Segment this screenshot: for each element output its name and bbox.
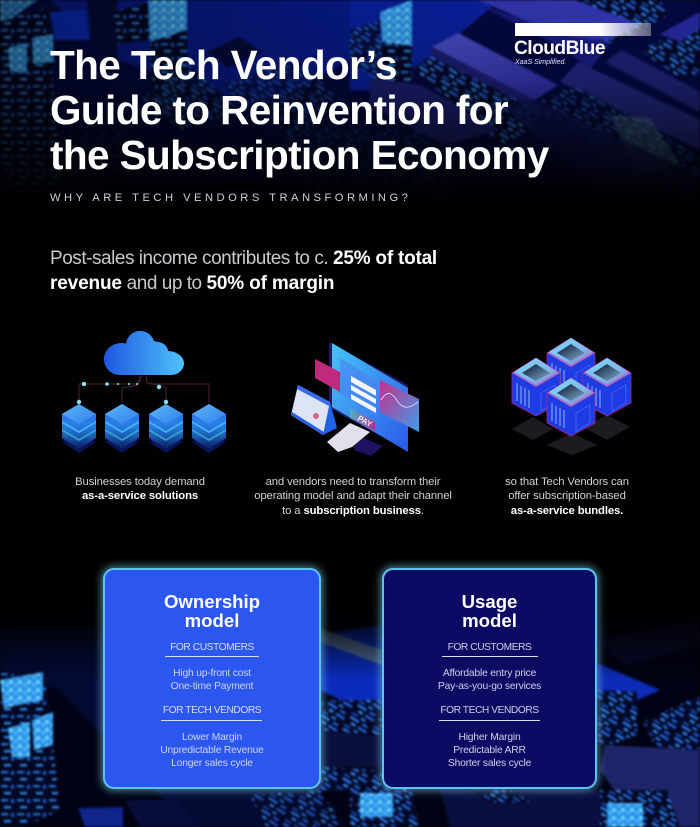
cloud	[104, 331, 184, 375]
panel: ownership model	[103, 568, 321, 789]
customer points: Affordable entry price	[443, 668, 536, 679]
receipt	[327, 423, 370, 452]
heading	[164, 591, 260, 631]
logo wordmark: CloudBlue	[514, 38, 605, 59]
connection lines	[79, 376, 209, 403]
heading: model	[185, 610, 239, 631]
caption: subscription business	[254, 476, 452, 516]
calendar	[291, 385, 337, 435]
intro statement: Post-sales income contributes to c. 25% of total	[50, 248, 437, 269]
icon: payment screen with calendar and receipt	[291, 342, 419, 456]
caption: as-a-service bundles	[505, 476, 629, 516]
vendor points: Longer sales cycle	[171, 758, 253, 769]
vendor points: Higher Margin	[458, 732, 521, 743]
vendor points: Shorter sales cycle	[448, 758, 531, 769]
bottom background	[0, 600, 700, 827]
pay button: PAY	[356, 414, 374, 429]
vendor points: Unpredictable Revenue	[160, 745, 264, 756]
caption: subscription business: and vendors need to transform their	[266, 476, 440, 488]
underline	[442, 656, 538, 657]
intro statement: revenue and up to 50% of margin	[50, 273, 334, 294]
caption: subscription business: to a subscription business.	[282, 504, 424, 516]
title: The Tech Vendor’s	[50, 42, 397, 88]
logo tagline: XaaS Simplified.	[515, 59, 566, 66]
chart panel	[380, 380, 419, 432]
vendor points: Lower Margin	[182, 732, 242, 743]
caption: as-a-service solutions: Businesses today demand	[75, 476, 205, 488]
title: the Subscription Economy	[50, 132, 549, 178]
vendor points	[160, 732, 264, 769]
top background	[0, 0, 700, 220]
heading: Usage	[462, 591, 517, 612]
credit card	[315, 359, 340, 392]
customer points	[438, 668, 541, 692]
caption: as-a-service solutions	[75, 476, 205, 502]
underline	[165, 656, 259, 657]
underline	[439, 720, 540, 721]
monitor	[329, 342, 408, 456]
vendor points	[448, 732, 531, 769]
underline	[161, 720, 262, 721]
for tech vendors label: FOR TECH VENDORS	[440, 705, 539, 716]
customer points: High up-front cost	[173, 668, 251, 679]
intro statement	[50, 248, 437, 294]
logo bar	[515, 23, 651, 36]
title: Guide to Reinvention for	[50, 86, 508, 132]
heading	[462, 591, 517, 631]
caption: as-a-service bundles: so that Tech Vendors can	[505, 476, 629, 488]
caption: subscription business: operating model and adapt their channel	[254, 490, 452, 502]
caption: as-a-service solutions: as-a-service solutions	[82, 490, 198, 502]
containers	[512, 338, 631, 436]
icon: cloud network with servers	[62, 331, 226, 453]
network nodes	[77, 382, 168, 404]
form fields	[351, 376, 376, 413]
heading: model	[462, 610, 517, 631]
for customers label: FOR CUSTOMERS	[170, 642, 254, 653]
pay button	[350, 408, 375, 431]
subtitle: WHY ARE TECH VENDORS TRANSFORMING?	[50, 192, 411, 204]
title	[50, 42, 549, 178]
logo: CloudBlue	[514, 23, 651, 66]
for tech vendors label: FOR TECH VENDORS	[163, 705, 261, 716]
customer points	[171, 668, 254, 692]
heading: Ownership	[164, 591, 260, 612]
caption: as-a-service bundles: as-a-service bundles.	[511, 504, 623, 516]
customer points: Pay-as-you-go services	[438, 681, 541, 692]
customer points: One-time Payment	[171, 681, 253, 692]
shadows	[512, 415, 630, 455]
panel: usage model	[382, 568, 597, 789]
server stacks	[62, 404, 226, 453]
vendor points: Predictable ARR	[453, 745, 526, 756]
caption: as-a-service bundles: offer subscription-based	[508, 490, 626, 502]
for customers label: FOR CUSTOMERS	[448, 642, 531, 653]
icon: four server containers	[512, 338, 632, 455]
